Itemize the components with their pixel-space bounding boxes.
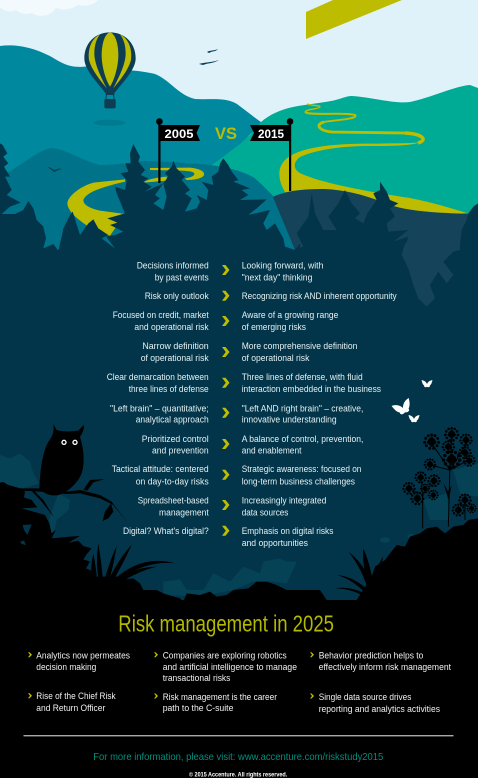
2025 list column 1: Analytics now permeates (36, 650, 130, 660)
2025 list column 1: Rise of the Chief Risk (36, 691, 116, 701)
flag 2005: 2005 (164, 129, 194, 141)
flag 2015 (250, 118, 293, 191)
comparison 2015 column: and opportunities (242, 538, 308, 548)
comparison 2015 column: Emphasis on digital risks (242, 526, 334, 536)
sky background (0, 0, 478, 240)
dark hill, right (273, 189, 478, 262)
comparison 2015 column: Looking forward, with (242, 260, 323, 270)
comparison 2005 column: on day-to-day risks (136, 476, 209, 486)
dark lower background (0, 250, 478, 600)
2025 list column 1: and Return Officer (36, 703, 105, 713)
flag 2015: 2015 (258, 129, 285, 141)
comparison 2015 column: of operational risk (242, 353, 310, 363)
2025 list column 2: and artificial intelligence to manage (163, 662, 297, 672)
owl on a branch (20, 424, 127, 522)
2025 list column 3: Behavior prediction helps to (319, 650, 423, 660)
small silhouette holes in foliage (20, 524, 32, 545)
comparison 2005 column: Spreadsheet-based (138, 496, 209, 506)
comparison 2015 column: "next day" thinking (242, 272, 312, 282)
grass, left (91, 543, 175, 585)
middle hill (0, 148, 335, 250)
VS label: VS (215, 125, 237, 143)
comparison 2005 column: and prevention (152, 446, 209, 456)
2025 list column 3 (319, 650, 451, 714)
2025 list arrows (28, 652, 314, 698)
river, left (67, 163, 204, 236)
comparison 2005 column: Digital? What's digital? (123, 526, 209, 536)
comparison 2005 column: three lines of defense (129, 384, 209, 394)
heading: risk management in 2025: Risk management in 2025 (118, 611, 334, 637)
comparison 2015 column: Three lines of defense, with fluid (242, 372, 363, 382)
pine forest, right (280, 182, 478, 263)
river foreground, right (279, 139, 467, 230)
yellow banner shape (306, 0, 402, 39)
flowering plants silhouette (402, 427, 477, 528)
faint pine tree, upper right (402, 243, 460, 307)
comparison 2005 column: Narrow definition (142, 341, 209, 351)
grass, right (335, 548, 383, 600)
comparison 2005 column: management (159, 508, 209, 518)
hot air balloon (84, 32, 136, 108)
river in the distance, right (305, 104, 423, 143)
2025 list column 1 (36, 650, 130, 713)
comparison 2005 column: Clear demarcation between (107, 372, 209, 382)
left teal mountain (0, 45, 261, 200)
2025 list column 2 (163, 650, 297, 713)
comparison 2015 column: A balance of control, prevention, (242, 434, 363, 444)
2025 list column 2: Companies are exploring robotics (163, 650, 287, 660)
comparison 2015 column: of emerging risks (242, 322, 306, 332)
comparison 2005 column: Tactical attitude: centered (112, 464, 209, 474)
comparison 2015 column: long-term business challenges (242, 476, 355, 486)
balloon shadow (93, 120, 125, 126)
comparison 2005 column: Risk only outlook (145, 291, 209, 301)
comparison 2015 column: data sources (242, 508, 289, 518)
black foreground (0, 482, 478, 778)
cloud (0, 0, 98, 16)
2025 list column 3: reporting and analytics activities (319, 704, 440, 714)
comparison 2005 column: "Left brain" – quantitative; (110, 404, 209, 414)
comparison 2005 column: Decisions informed (137, 260, 209, 270)
flag 2005 (156, 118, 200, 183)
2025 list column 3: Single data source drives (319, 692, 412, 702)
comparison 2005 column: analytical approach (136, 414, 209, 424)
2025 list column 1: decision making (36, 662, 96, 672)
comparison 2015 column: More comprehensive definition (242, 341, 357, 351)
comparison 2015 column (242, 260, 397, 548)
butterflies (392, 380, 432, 422)
comparison 2015 column: Recognizing risk AND inherent opportunity (242, 291, 397, 301)
comparison 2015 column: and enablement (242, 446, 302, 456)
comparison 2005 column: by past events (155, 272, 209, 282)
comparison 2005 column: of operational risk (141, 353, 209, 363)
pine forest, left and centre (0, 143, 300, 273)
comparison 2015 column: interaction embedded in the business (242, 384, 381, 394)
comparison arrows (222, 265, 230, 536)
comparison 2005 column: Focused on credit, market (113, 310, 209, 320)
right green mountain (211, 85, 478, 225)
comparison 2005 column: Prioritized control (142, 434, 209, 444)
comparison 2015 column: Strategic awareness: focused on (242, 464, 361, 474)
comparison 2015 column: innovative understanding (242, 414, 337, 424)
2025 list column 3: effectively inform risk management (319, 662, 451, 672)
comparison 2015 column: Aware of a growing range (242, 310, 338, 320)
comparison 2005 column: and operational risk (134, 322, 209, 332)
footer link: For more information, please visit: www.accenture.com/riskstudy2015 (93, 751, 383, 763)
comparison 2005 column (107, 260, 209, 536)
2025 list column 2: transactional risks (163, 673, 231, 683)
comparison 2015 column: Increasingly integrated (242, 496, 326, 506)
comparison 2015 column: "Left AND right brain" – creative, (242, 404, 363, 414)
2025 list column 2: Risk management is the career (163, 692, 277, 702)
2025 list column 2: path to the C-suite (163, 703, 233, 713)
lower forest glow (0, 453, 478, 597)
birds (47, 49, 219, 172)
